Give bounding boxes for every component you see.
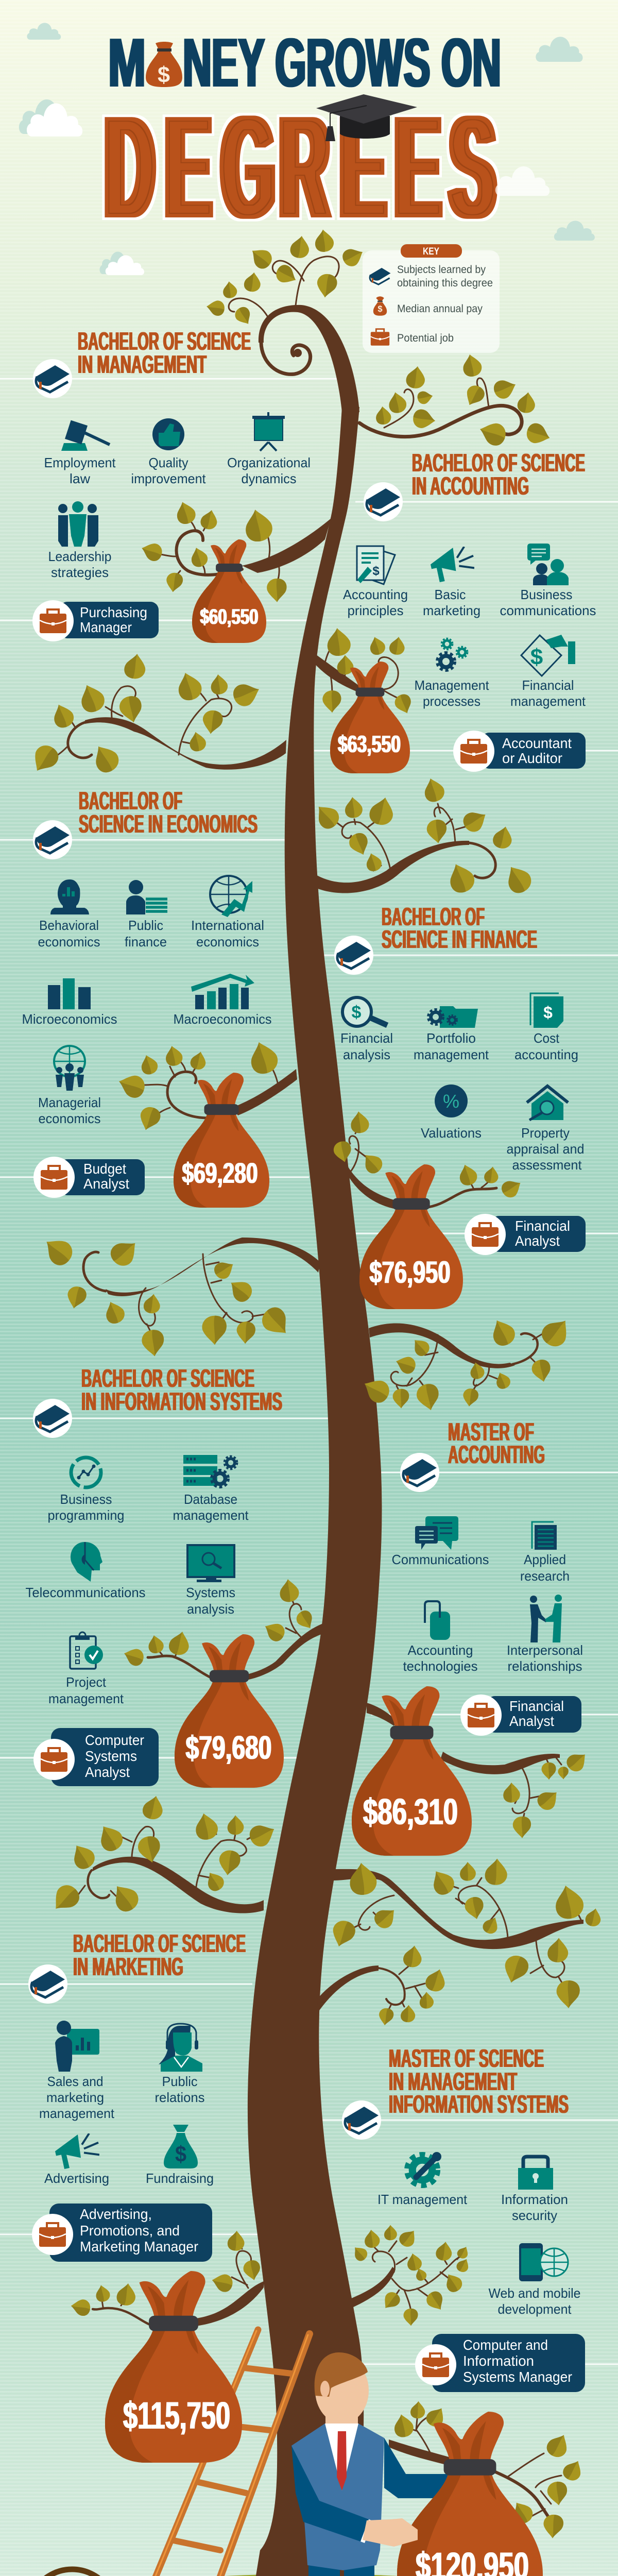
heading: IN INFORMATION SYSTEMS bbox=[81, 1388, 282, 1416]
label: organizational dynamics: Organizational bbox=[227, 455, 311, 470]
icon: megaphone bbox=[431, 547, 474, 582]
icon: behavioral economics bbox=[50, 879, 89, 914]
heading: IN ACCOUNTING bbox=[412, 472, 529, 500]
label: property appraisal and assessment: Property bbox=[521, 1125, 570, 1141]
key: pay bbox=[373, 296, 483, 316]
heading bbox=[73, 1930, 246, 1981]
heading: BACHELOR OF SCIENCE bbox=[78, 328, 251, 355]
icon: leadership group bbox=[58, 501, 98, 547]
icon: property appraisal bbox=[527, 1086, 568, 1120]
icon: telecommunications bbox=[71, 1542, 102, 1582]
job: advertising promotions marketing manager bbox=[32, 2204, 212, 2262]
label: managerial economics: Managerial bbox=[38, 1095, 101, 1110]
job: accountant or auditor: or Auditor bbox=[502, 750, 562, 766]
icon: presentation board bbox=[252, 412, 285, 451]
book badge bbox=[33, 359, 72, 398]
section: information systems bbox=[26, 1365, 282, 1786]
label: communications: Communications bbox=[391, 1552, 489, 1567]
label: public finance bbox=[125, 918, 167, 950]
book badge bbox=[33, 820, 72, 859]
man: head bbox=[315, 2358, 369, 2424]
icon: IT gear and wrench bbox=[407, 2152, 441, 2185]
label: management processes: Management bbox=[414, 677, 489, 693]
heading: IN MANAGEMENT bbox=[78, 351, 207, 379]
label: portfolio management: Portfolio bbox=[426, 1030, 476, 1046]
label: interpersonal relationships: Interpersonal bbox=[507, 1642, 583, 1658]
ladder bbox=[122, 2330, 310, 2576]
heading: IN MANAGEMENT bbox=[389, 2068, 517, 2096]
branch: left of economics bbox=[27, 652, 286, 777]
label: financial management bbox=[510, 677, 586, 709]
clouds bbox=[19, 23, 595, 275]
heading: IN MARKETING bbox=[73, 1953, 183, 1981]
label: accounting principles: principles bbox=[347, 603, 404, 618]
title: money grows on bbox=[108, 24, 501, 101]
icon: international economics bbox=[210, 876, 252, 917]
label: employment law bbox=[44, 455, 116, 486]
label: basic marketing bbox=[423, 587, 480, 618]
job: computer systems analyst: Computer bbox=[85, 1732, 144, 1748]
label: public finance: finance bbox=[125, 934, 167, 950]
label: information security: security bbox=[512, 2208, 557, 2223]
heading bbox=[448, 1418, 545, 1469]
label: accounting technologies: Accounting bbox=[408, 1642, 473, 1658]
man: hair bbox=[315, 2352, 368, 2397]
money bag: $79,680 bbox=[175, 1634, 284, 1788]
label: public finance: Public bbox=[128, 918, 163, 933]
icon: financial management bbox=[521, 635, 575, 676]
label: international economics: International bbox=[191, 918, 264, 933]
book badge bbox=[364, 482, 403, 521]
icon: financial management: $ bbox=[530, 645, 543, 670]
label: cost accounting bbox=[514, 1030, 578, 1062]
book badge bbox=[400, 1453, 439, 1492]
label: financial analysis bbox=[340, 1030, 393, 1062]
label: international economics bbox=[191, 918, 264, 950]
heading bbox=[79, 787, 258, 838]
man: hand on bag bbox=[363, 2518, 418, 2547]
label: systems analysis bbox=[186, 1585, 235, 1617]
man: jacket bbox=[291, 2424, 384, 2570]
label: telecommunications: Telecommunications bbox=[26, 1585, 145, 1600]
money bag: $76,950 bbox=[359, 1164, 463, 1309]
book badge bbox=[334, 936, 373, 975]
key: subjects: obtaining this degree bbox=[397, 277, 493, 289]
label: employment law: Employment bbox=[44, 455, 116, 470]
heading: BACHELOR OF bbox=[382, 903, 485, 931]
job: advertising promotions marketing manager: Marketing Manager bbox=[80, 2239, 198, 2255]
section: finance bbox=[334, 903, 586, 1255]
job: financial analyst (masters): Financial bbox=[509, 1698, 564, 1714]
heading bbox=[389, 2045, 569, 2119]
key: subjects: Subjects learned by bbox=[397, 264, 486, 276]
branch: bag 1 bbox=[139, 500, 331, 602]
money bag: $69,280 bbox=[174, 1073, 269, 1208]
label: sales and marketing management: marketing bbox=[46, 2090, 104, 2105]
money bag: $60,550: $60,550 bbox=[200, 604, 259, 629]
branch: bag 2 bbox=[313, 627, 415, 716]
job: accountant or auditor bbox=[453, 731, 586, 772]
job: budget analyst bbox=[33, 1157, 145, 1198]
label: business programming bbox=[47, 1492, 125, 1523]
icon: project clipboard bbox=[70, 1632, 103, 1669]
icon: gears bbox=[437, 638, 468, 670]
label: applied research: research bbox=[520, 1568, 570, 1584]
heading: ACCOUNTING bbox=[448, 1441, 545, 1469]
branch: right above master of accounting bbox=[359, 1313, 575, 1412]
heading bbox=[78, 328, 251, 379]
label: database management: management bbox=[173, 1507, 249, 1523]
label: information security bbox=[501, 2192, 568, 2223]
label: interpersonal relationships: relationships bbox=[508, 1658, 582, 1674]
icon: microeconomics bars bbox=[48, 978, 91, 1009]
branch: right of trunk lower bbox=[350, 2225, 472, 2326]
label: it management: IT management bbox=[377, 2192, 468, 2207]
label: quality improvement: Quality bbox=[148, 455, 188, 470]
job: computer systems analyst: Analyst bbox=[85, 1764, 130, 1780]
branch: right large bbox=[328, 1858, 603, 2008]
icon: accounting technologies mouse bbox=[425, 1601, 450, 1640]
label: interpersonal relationships bbox=[507, 1642, 583, 1674]
label: behavioral economics: economics bbox=[38, 934, 100, 950]
icon: managerial economics bbox=[54, 1046, 85, 1091]
icon: magnifier: $ bbox=[352, 1003, 362, 1022]
key: job: Potential job bbox=[397, 332, 454, 344]
icon: fundraising bag: $ bbox=[175, 2142, 186, 2167]
money bag: $63,550 bbox=[330, 662, 410, 773]
icon: cost document: $ bbox=[543, 1003, 553, 1022]
label: cost accounting: accounting bbox=[514, 1047, 578, 1062]
basket of apples bbox=[21, 2569, 123, 2576]
book badge bbox=[33, 1399, 72, 1438]
label: accounting principles: Accounting bbox=[343, 587, 408, 602]
money bag: $86,310 bbox=[352, 1686, 472, 1856]
heading: MASTER OF bbox=[448, 1418, 534, 1446]
label: behavioral economics: Behavioral bbox=[39, 918, 99, 933]
label: business programming: programming bbox=[47, 1507, 125, 1523]
job: computer systems analyst: Systems bbox=[85, 1748, 137, 1764]
icon: title money bag: $ bbox=[158, 62, 170, 88]
label: sales and marketing management: management bbox=[39, 2106, 115, 2121]
label: quality improvement bbox=[131, 455, 206, 486]
label: leadership strategies: strategies bbox=[51, 565, 109, 580]
label: basic marketing: Basic bbox=[435, 587, 466, 602]
job: purchasing manager: Purchasing bbox=[80, 604, 147, 620]
money bag: $115,750: $115,750 bbox=[123, 2394, 230, 2437]
job: financial analyst: Analyst bbox=[515, 1233, 560, 1249]
money bag: $76,950: $76,950 bbox=[370, 1255, 450, 1290]
job: advertising promotions marketing manager: Promotions, and bbox=[80, 2223, 180, 2239]
money bag: $120,950 bbox=[397, 2412, 543, 2576]
branch: right lower bbox=[317, 1944, 449, 2026]
branch: bag 5 bbox=[122, 1578, 324, 1681]
branch: bag 4 bbox=[332, 1111, 525, 1210]
label: accounting principles bbox=[343, 587, 408, 618]
label: public relations bbox=[154, 2074, 205, 2105]
icon: database management bbox=[183, 1455, 237, 1487]
label: valuations: Valuations bbox=[421, 1125, 482, 1141]
heading: BACHELOR OF SCIENCE bbox=[73, 1930, 246, 1958]
branch: bag 8 bbox=[389, 2401, 586, 2539]
section: marketing bbox=[28, 1930, 246, 2262]
icon: applied research bbox=[532, 1522, 557, 1550]
money bag: $79,680: $79,680 bbox=[185, 1729, 272, 1766]
icon: public finance bbox=[126, 880, 167, 914]
icon: valuations percent: % bbox=[443, 1091, 459, 1112]
label: systems analysis: analysis bbox=[187, 1601, 234, 1617]
icon: interpersonal handshake bbox=[530, 1595, 562, 1642]
label: advertising: Advertising bbox=[44, 2171, 109, 2186]
job: financial analyst (masters): Analyst bbox=[509, 1713, 554, 1729]
label: financial management: management bbox=[510, 693, 586, 709]
icon: magnifier bbox=[342, 997, 387, 1026]
section: accounting bbox=[343, 449, 596, 772]
man: left arm bbox=[291, 2446, 369, 2541]
icon: valuations percent bbox=[435, 1084, 468, 1117]
section: master of accounting bbox=[391, 1418, 583, 1736]
label: business communications bbox=[500, 587, 596, 618]
icon: communications bubbles bbox=[415, 1516, 458, 1550]
icon: portfolio bbox=[428, 1006, 478, 1028]
section: management bbox=[32, 328, 311, 641]
money bag: $115,750 bbox=[105, 2271, 242, 2463]
man in suit bbox=[291, 2352, 449, 2576]
label: managerial economics: economics bbox=[38, 1111, 101, 1126]
section: economics bbox=[22, 787, 272, 1198]
icon: business communications bbox=[527, 544, 569, 585]
job: computer and information systems manager: Computer and bbox=[463, 2337, 548, 2353]
label: database management bbox=[173, 1492, 249, 1523]
icon: translucent cloud bbox=[495, 166, 550, 196]
man: neck bbox=[325, 2406, 358, 2432]
label: applied research bbox=[520, 1552, 570, 1584]
key: pay: Median annual pay bbox=[397, 303, 483, 315]
job: financial analyst (masters) bbox=[460, 1694, 581, 1736]
job: financial analyst bbox=[465, 1214, 586, 1255]
ground hill bbox=[0, 2574, 618, 2576]
icon: business programming bbox=[71, 1458, 101, 1487]
section: management information systems bbox=[342, 2045, 585, 2392]
label: leadership strategies: Leadership bbox=[48, 549, 111, 564]
money bag: $86,310: $86,310 bbox=[363, 1792, 458, 1833]
label: quality improvement: improvement bbox=[131, 471, 206, 486]
icon: sales presenter bbox=[55, 2021, 99, 2072]
label: organizational dynamics bbox=[227, 455, 311, 486]
branch: bag 3 bbox=[115, 1039, 297, 1133]
job: financial analyst: Financial bbox=[515, 1218, 570, 1234]
label: business communications: communications bbox=[500, 603, 596, 618]
label: public relations: relations bbox=[154, 2090, 205, 2105]
label: organizational dynamics: dynamics bbox=[241, 471, 297, 486]
icon: macroeconomics chart bbox=[191, 974, 254, 1009]
label: management processes: processes bbox=[423, 693, 480, 709]
label: web and mobile development bbox=[488, 2285, 581, 2317]
job: computer and information systems manager bbox=[415, 2334, 585, 2392]
label: portfolio management bbox=[414, 1030, 489, 1062]
branch: top of tree bbox=[205, 229, 366, 328]
heading bbox=[382, 903, 537, 954]
label: microeconomics: Microeconomics bbox=[22, 1011, 117, 1027]
key heading pill: KEY bbox=[423, 246, 439, 257]
heading bbox=[412, 449, 585, 500]
job: purchasing manager: Manager bbox=[80, 619, 132, 635]
label: project management: Project bbox=[66, 1674, 107, 1690]
branch: left of marketing bbox=[47, 1793, 279, 1917]
icon: systems analysis monitor bbox=[187, 1545, 234, 1582]
label: sales and marketing management bbox=[39, 2074, 115, 2121]
label: behavioral economics bbox=[38, 918, 100, 950]
job: advertising promotions marketing manager: Advertising, bbox=[80, 2206, 152, 2222]
key: job bbox=[371, 329, 454, 346]
money bag: $63,550: $63,550 bbox=[338, 731, 401, 757]
man: tie bbox=[337, 2431, 347, 2490]
label: managerial economics bbox=[38, 1095, 101, 1126]
label: financial analysis: analysis bbox=[343, 1047, 390, 1062]
man: shirt bbox=[325, 2424, 358, 2490]
job: computer and information systems manager: Information bbox=[463, 2353, 534, 2369]
branch: left below finance bag bbox=[39, 1232, 320, 1357]
job: computer systems analyst bbox=[33, 1728, 159, 1786]
label: property appraisal and assessment: assessment bbox=[512, 1157, 582, 1173]
icon: title money bag bbox=[146, 42, 182, 88]
key: subjects bbox=[370, 264, 493, 289]
job: budget analyst: Analyst bbox=[83, 1176, 129, 1192]
icon: lock bbox=[518, 2157, 553, 2190]
label: portfolio management: management bbox=[414, 1047, 489, 1062]
label: project management: management bbox=[48, 1691, 124, 1706]
label: web and mobile development: development bbox=[497, 2301, 572, 2317]
label: business communications: Business bbox=[520, 587, 573, 602]
label: public relations: Public bbox=[162, 2074, 198, 2089]
book badge bbox=[342, 2100, 381, 2140]
title: money grows on: M bbox=[108, 24, 146, 101]
label: project management bbox=[48, 1674, 124, 1706]
branch: bag 7 bbox=[70, 2230, 264, 2326]
label: cost accounting: Cost bbox=[534, 1030, 560, 1046]
label: fundraising: Fundraising bbox=[146, 2171, 214, 2186]
money bag: $69,280: $69,280 bbox=[182, 1157, 258, 1189]
key heading pill bbox=[401, 244, 462, 258]
job: purchasing manager bbox=[32, 600, 159, 641]
icon: accounting document bbox=[357, 546, 395, 584]
icon: web and mobile bbox=[519, 2243, 568, 2281]
icon: cost document bbox=[530, 993, 563, 1028]
label: financial management: Financial bbox=[522, 677, 574, 693]
icon: public relations headset bbox=[159, 2024, 202, 2072]
label: systems analysis: Systems bbox=[186, 1585, 235, 1600]
icon: advertising megaphone bbox=[55, 2133, 99, 2169]
man: trousers bbox=[308, 2563, 374, 2576]
label: leadership strategies bbox=[48, 549, 111, 580]
title: degrees: DEGREES bbox=[106, 86, 495, 248]
heading: SCIENCE IN ECONOMICS bbox=[79, 810, 258, 838]
icon: gavel bbox=[61, 420, 110, 451]
label: sales and marketing management: Sales and bbox=[47, 2074, 103, 2089]
label: database management: Database bbox=[184, 1492, 237, 1507]
book badge bbox=[28, 1964, 67, 2004]
label: employment law: law bbox=[70, 471, 90, 486]
job: computer and information systems manager: Systems Manager bbox=[463, 2369, 572, 2385]
money bag: $60,550 bbox=[192, 539, 266, 643]
label: information security: Information bbox=[501, 2192, 568, 2207]
label: business programming: Business bbox=[60, 1492, 112, 1507]
label: financial analysis: Financial bbox=[340, 1030, 393, 1046]
label: accounting technologies bbox=[403, 1642, 478, 1674]
icon: fundraising bag bbox=[164, 2125, 198, 2168]
heading: BACHELOR OF SCIENCE bbox=[81, 1365, 254, 1393]
label: applied research: Applied bbox=[524, 1552, 566, 1567]
branch: bag 6 bbox=[367, 1703, 591, 1838]
job: accountant or auditor: Accountant bbox=[502, 735, 572, 751]
tree trunk bbox=[239, 305, 382, 2576]
label: property appraisal and assessment: appraisal and bbox=[507, 1141, 584, 1157]
job: budget analyst: Budget bbox=[83, 1161, 126, 1177]
key panel bbox=[363, 244, 500, 353]
heading: BACHELOR OF bbox=[79, 787, 182, 815]
label: basic marketing: marketing bbox=[423, 603, 480, 618]
label: international economics: economics bbox=[196, 934, 259, 950]
icon: graduation cap bbox=[316, 94, 417, 141]
branch: accounting side bbox=[359, 353, 553, 448]
man: right arm bbox=[384, 2438, 449, 2498]
label: macroeconomics: Macroeconomics bbox=[173, 1011, 272, 1027]
label: management processes bbox=[414, 677, 489, 709]
icon: thumb bbox=[152, 418, 184, 450]
heading bbox=[81, 1365, 282, 1416]
label: web and mobile development: Web and mobile bbox=[488, 2285, 581, 2301]
branch: right of finance heading bbox=[311, 776, 535, 896]
label: property appraisal and assessment bbox=[507, 1125, 584, 1173]
icon: accounting document: $ bbox=[372, 564, 380, 578]
label: accounting technologies: technologies bbox=[403, 1658, 478, 1674]
